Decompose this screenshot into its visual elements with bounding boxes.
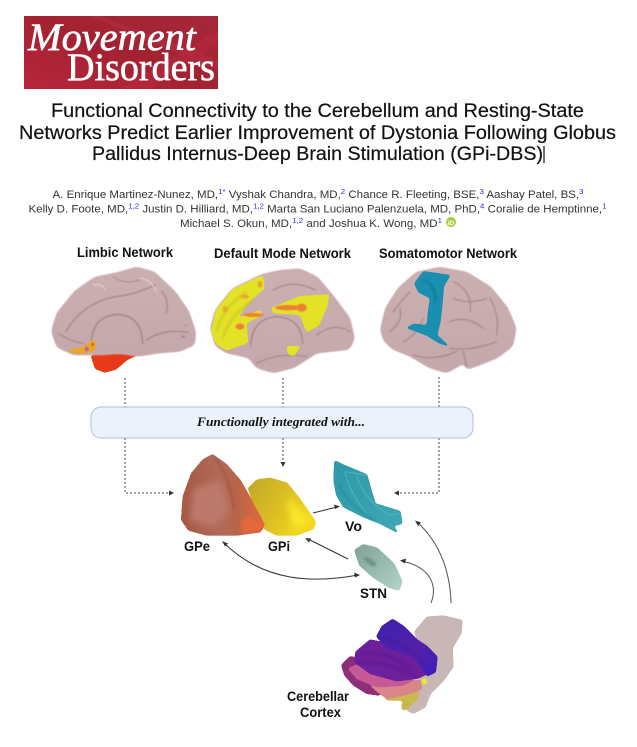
authors: 1,2 bbox=[128, 202, 139, 210]
authors: Coralie de Hemptinne, bbox=[484, 204, 602, 216]
structure labels: Vo bbox=[345, 518, 362, 534]
authors: 1,2 bbox=[253, 202, 264, 210]
title: Pallidus Internus-Deep Brain Stimulation (GPi-DBS) bbox=[92, 144, 543, 165]
network labels: Somatomotor Network bbox=[379, 246, 517, 261]
brainstem bbox=[406, 615, 463, 714]
GPi structure bbox=[248, 478, 316, 536]
authors: Michael S. Okun, MD, bbox=[180, 218, 287, 230]
arrow: GPi to Vo bbox=[313, 504, 340, 513]
integration banner bbox=[91, 407, 473, 438]
authors: 2 bbox=[341, 187, 345, 196]
structure labels: STN bbox=[360, 585, 387, 601]
arrow: STN to GPi bbox=[305, 538, 348, 559]
dashed connector: default mode network to GPi bbox=[280, 378, 286, 467]
network labels: Default Mode Network bbox=[214, 246, 351, 261]
authors: and Joshua K. Wong, MD bbox=[303, 218, 438, 230]
STN structure bbox=[354, 544, 403, 591]
brain: somatomotor network bbox=[381, 268, 516, 372]
authors: Vyshak Chandra, MD, bbox=[226, 189, 341, 201]
authors bbox=[28, 187, 606, 230]
structure labels bbox=[184, 518, 387, 601]
authors: 1* bbox=[218, 187, 226, 196]
brain: limbic network bbox=[52, 268, 195, 373]
title: Functional Connectivity to the Cerebellum and Resting-State bbox=[51, 101, 584, 122]
authors: 4 bbox=[480, 202, 484, 210]
structure labels: GPi bbox=[268, 538, 290, 554]
authors: A. Enrique Martinez-Nunez, MD, bbox=[52, 189, 211, 201]
arrow: cerebellar cortex to Vo bbox=[415, 520, 451, 603]
label: cerebellar cortex bbox=[287, 689, 350, 720]
authors: Kelly D. Foote, MD, bbox=[28, 204, 124, 216]
label: cerebellar cortex: Cerebellar bbox=[287, 689, 350, 704]
authors: Aashay Patel, BS, bbox=[484, 189, 579, 201]
authors: 1 bbox=[438, 216, 442, 225]
title bbox=[19, 101, 616, 165]
journal logo: Movement Disorders: Disorders bbox=[67, 46, 215, 89]
authors: iD bbox=[448, 220, 455, 227]
authors: 1,2 bbox=[292, 216, 303, 225]
dashed connector: limbic network to GPe bbox=[125, 378, 174, 496]
authors: 3 bbox=[579, 187, 584, 196]
authors: 3 bbox=[479, 187, 484, 196]
network labels bbox=[77, 245, 517, 261]
GPe structure bbox=[181, 454, 265, 536]
arrow: cerebellar cortex to STN bbox=[400, 558, 433, 603]
title: Networks Predict Earlier Improvement of Dystonia Following Globus bbox=[19, 123, 616, 144]
brain: default mode network bbox=[211, 269, 354, 372]
dashed connector: somatomotor network to Vo bbox=[394, 377, 439, 496]
Vo structure bbox=[333, 460, 403, 534]
authors: Chance R. Fleeting, BSE, bbox=[345, 189, 479, 201]
authors: Justin D. Hilliard, MD, bbox=[139, 204, 253, 216]
arrow: STN to GPe bbox=[222, 541, 360, 579]
cerebellum and brainstem bbox=[341, 615, 463, 714]
integration banner: Functionally integrated with... bbox=[196, 414, 365, 429]
structure labels: GPe bbox=[184, 538, 210, 554]
network labels: Limbic Network bbox=[77, 245, 173, 260]
authors: Marta San Luciano Palenzuela, MD, PhD, bbox=[264, 204, 480, 216]
label: cerebellar cortex: Cortex bbox=[300, 705, 341, 720]
journal logo: Movement Disorders: Movement bbox=[27, 16, 197, 59]
journal logo: Movement Disorders bbox=[24, 16, 218, 89]
authors: 1 bbox=[602, 202, 606, 210]
